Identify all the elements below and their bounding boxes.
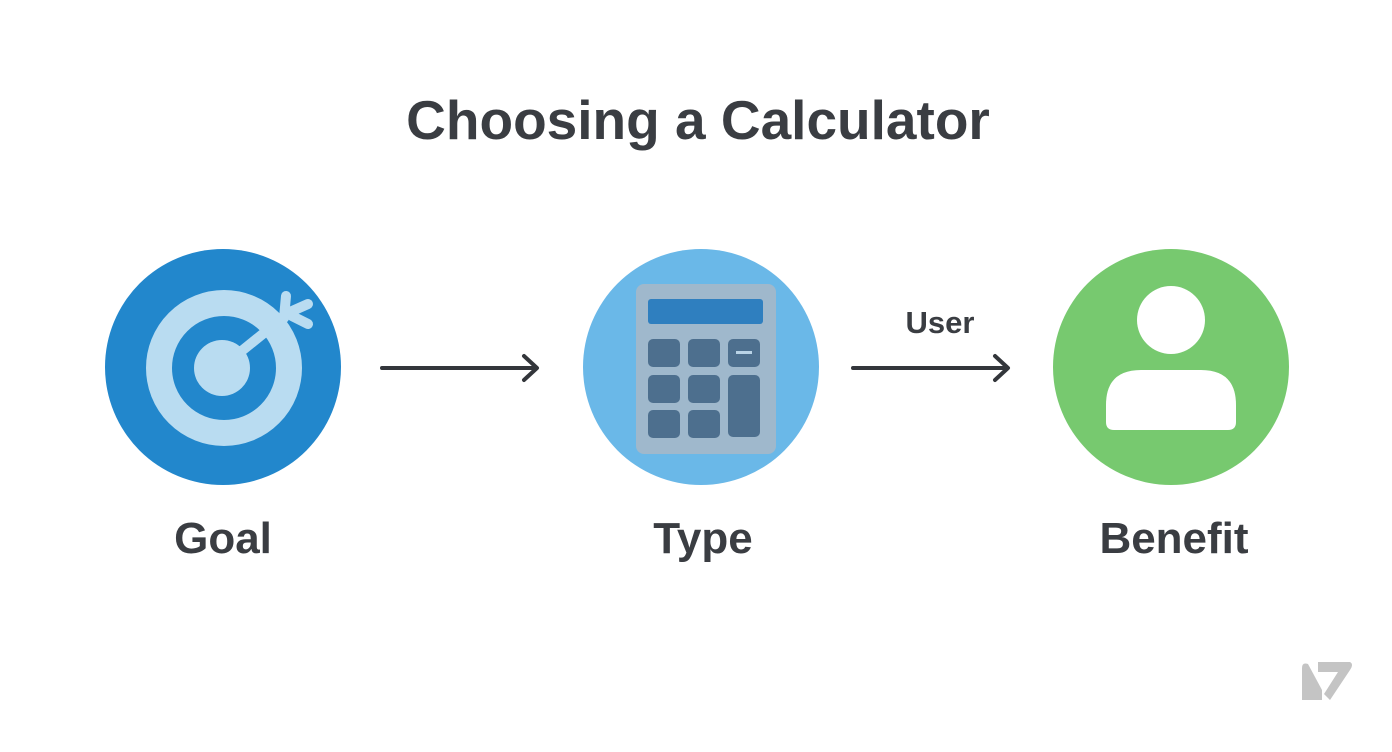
label: Benefit: Benefit: [1099, 514, 1249, 563]
label: User: User: [906, 305, 974, 340]
title: Choosing a Calculator: [406, 89, 990, 151]
label: Type: Type: [653, 514, 753, 563]
label: Goal: Goal: [174, 514, 272, 563]
icon: calculator: [583, 249, 819, 485]
arrow 2: [853, 356, 1008, 380]
logo: [1302, 662, 1352, 700]
icon: user benefit: [1053, 249, 1289, 485]
arrow 1: [382, 356, 537, 380]
icon: goal target: [105, 249, 341, 485]
